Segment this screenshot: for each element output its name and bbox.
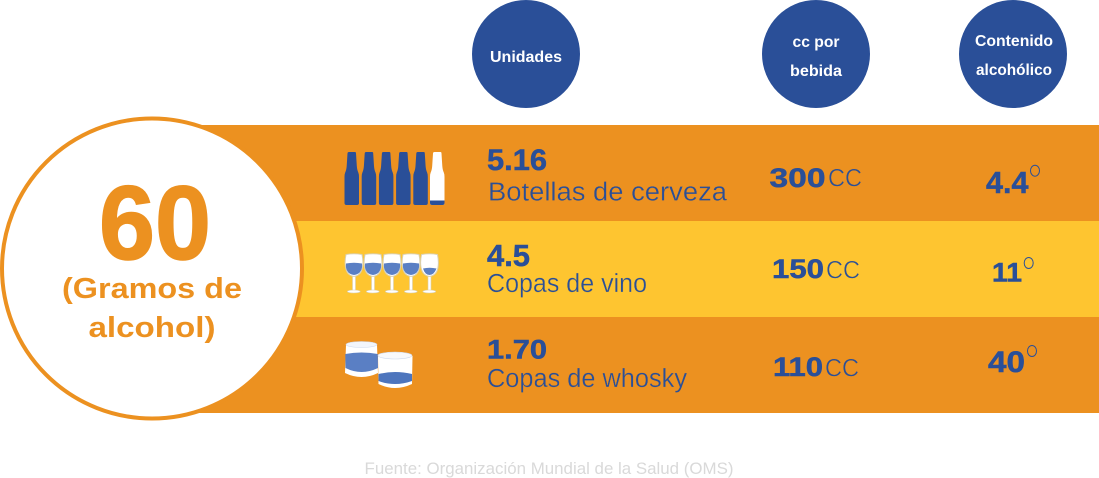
value: 150cc — [772, 254, 860, 284]
header: Unidades — [472, 0, 580, 108]
row text: whisky units: 1.70 — [487, 334, 547, 364]
row text: beer units — [487, 144, 728, 206]
badge: 60 grams of alcohol: 60 — [99, 165, 211, 282]
value: 110cc — [773, 352, 859, 382]
icon: beer bottles — [344, 152, 444, 205]
row text: wine units: 4.5 — [487, 238, 530, 273]
header: cc por bebida — [762, 0, 870, 108]
value: 11 degrees: 11 — [992, 258, 1022, 288]
row text: wine units: Copas de vino — [487, 270, 647, 298]
icon: wine glasses — [345, 254, 438, 293]
row text: wine units — [487, 238, 647, 298]
value: 40 degrees: 40 — [988, 346, 1025, 379]
value: 110cc: CC — [825, 354, 859, 382]
value: 300cc — [770, 163, 862, 193]
header: Contenido alcohólico: alcohólico — [976, 62, 1052, 79]
value: 110cc: 110 — [773, 352, 823, 382]
icon: whisky tumblers — [345, 342, 412, 388]
row text: whisky units: Copas de whosky — [487, 365, 687, 393]
row text: beer units: 5.16 — [487, 144, 547, 177]
value: 300cc: 300 — [770, 163, 826, 193]
value: 11 degrees — [992, 258, 1033, 288]
panel: bottom row whisky — [150, 317, 1099, 413]
badge: 60 grams of alcohol: (Gramos de — [62, 273, 242, 305]
header: Unidades: Unidades — [490, 49, 562, 66]
row text: beer units: Botellas de cerveza — [488, 178, 728, 206]
row text: whisky units — [487, 334, 687, 393]
header: Contenido alcohólico: Contenido — [975, 33, 1053, 50]
value: 40 degrees — [988, 346, 1036, 379]
value: 150cc: 150 — [772, 254, 824, 284]
panel: middle row wine — [150, 221, 1099, 317]
header: cc por bebida: bebida — [790, 63, 842, 80]
badge: 60 grams of alcohol — [2, 118, 302, 418]
value: 4.4 degrees: 4.4 — [986, 165, 1029, 200]
value: 300cc: CC — [828, 164, 862, 192]
header: Contenido alcohólico — [959, 0, 1067, 108]
source note: Fuente: Organización Mundial de la Salud (OMS) — [364, 459, 734, 478]
value: 150cc: CC — [826, 256, 860, 284]
badge: 60 grams of alcohol: alcohol) — [88, 312, 216, 344]
header: cc por bebida: cc por — [792, 34, 840, 51]
panel: top row beer — [150, 125, 1099, 221]
